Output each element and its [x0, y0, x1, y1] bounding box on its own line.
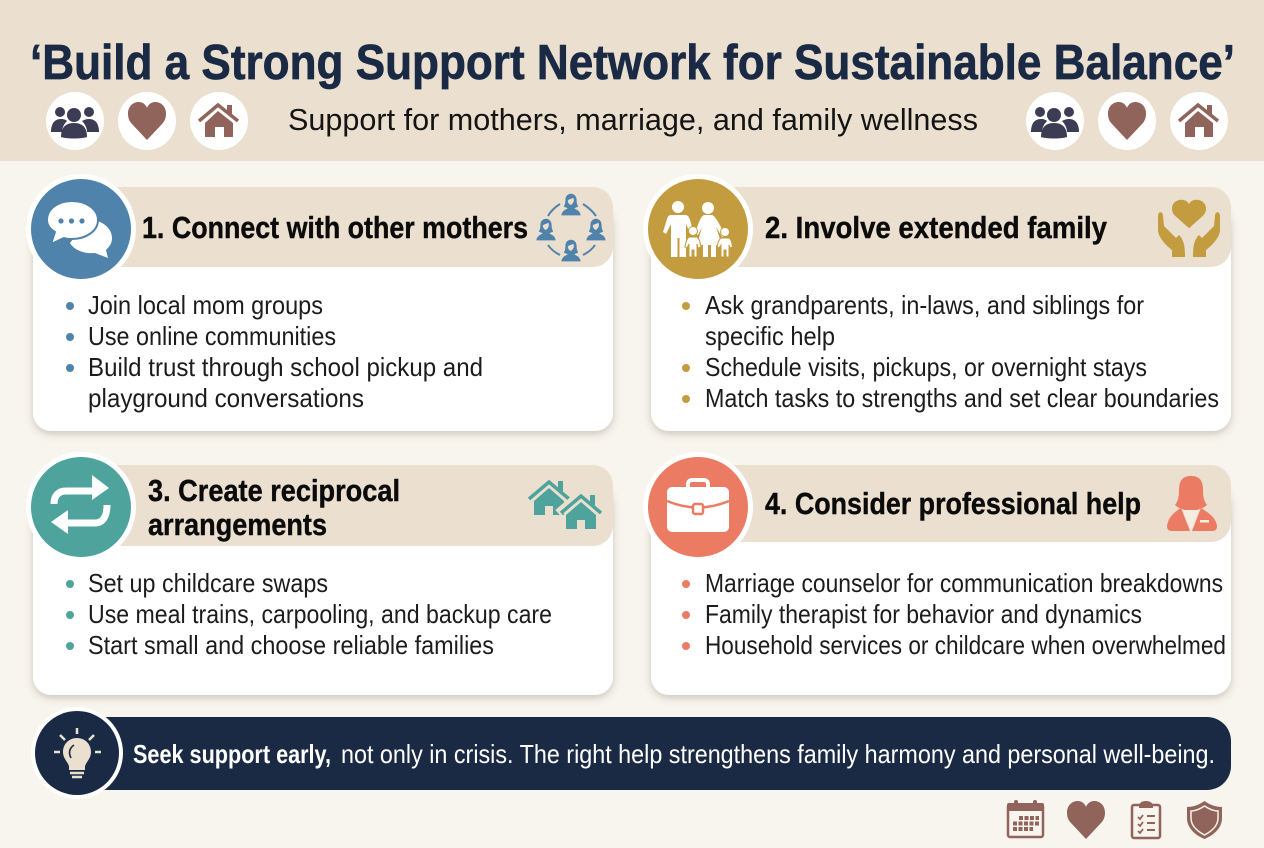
panel: consider professional help	[643, 452, 1231, 695]
bullet list: Set up childcare swaps	[88, 568, 328, 598]
bullet list	[682, 290, 1219, 413]
panel: involve extended family	[643, 174, 1231, 431]
icon: hands holding heart	[1158, 200, 1220, 257]
callout text: Seek support early,	[133, 739, 331, 769]
bullet list: specific help	[705, 321, 835, 351]
icon: circle of mothers	[536, 194, 606, 261]
subtitle: Support for mothers, marriage, and family wellness	[288, 102, 978, 137]
bullet list: Use meal trains, carpooling, and backup care	[88, 599, 552, 629]
footer icon row	[1007, 800, 1222, 839]
panel: create reciprocal arrangements	[26, 452, 613, 695]
bullet list: Use online communities	[88, 321, 336, 351]
bullet list: Schedule visits, pickups, or overnight stays	[705, 352, 1147, 382]
heading: 2. Involve extended family	[765, 210, 1108, 245]
header icons left	[46, 92, 248, 150]
bullet list: Family therapist for behavior and dynamics	[705, 599, 1142, 629]
icon: heart	[1067, 801, 1105, 839]
icon: speech bubbles	[26, 174, 136, 284]
icon: swap arrows	[26, 452, 136, 562]
panel: connect with other mothers	[26, 174, 613, 431]
panel: create reciprocal arrangements: arrangements	[148, 507, 327, 542]
icon: family	[643, 174, 753, 284]
heading: 1. Connect with other mothers	[142, 210, 528, 245]
icon: calendar	[1007, 800, 1044, 837]
icon: light bulb	[31, 707, 123, 799]
bullet list	[66, 568, 552, 660]
heading: 3. Create reciprocal	[148, 473, 400, 508]
header icons right	[1026, 92, 1228, 150]
bullet list	[66, 290, 483, 413]
bullet list: Start small and choose reliable families	[88, 630, 494, 660]
bullet list: Ask grandparents, in-laws, and siblings for	[705, 290, 1144, 320]
icon: two houses	[529, 481, 604, 529]
icon: shield	[1187, 801, 1222, 839]
icon: professional woman	[1167, 476, 1217, 532]
bullet list: Match tasks to strengths and set clear boundaries	[705, 383, 1219, 413]
heading: 4. Consider professional help	[765, 486, 1141, 521]
icon: checklist	[1132, 801, 1160, 838]
icon: briefcase	[643, 452, 753, 562]
bullet list: Build trust through school pickup and	[88, 352, 483, 382]
header banner	[0, 0, 1264, 161]
callout: seek support early	[31, 707, 1231, 799]
bullet list: playground conversations	[88, 383, 364, 413]
bullet list	[682, 568, 1226, 660]
bullet list: Join local mom groups	[88, 290, 323, 320]
